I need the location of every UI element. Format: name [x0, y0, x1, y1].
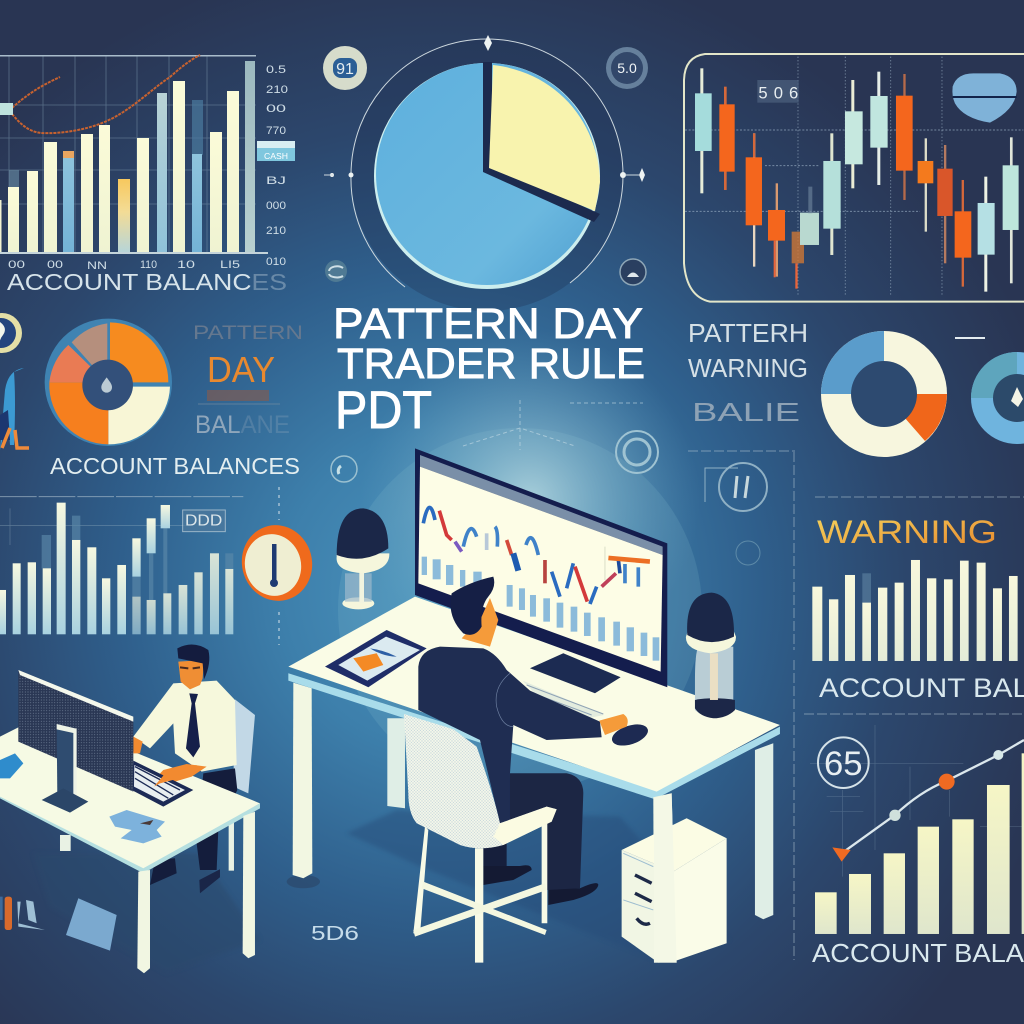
title: PATTERN DAY	[333, 300, 643, 348]
pie gap shadow	[483, 62, 600, 222]
icon: clock dial	[616, 431, 658, 473]
icon: top-right round badge	[606, 47, 648, 89]
icon: left small dial	[325, 260, 347, 282]
bars	[815, 753, 1024, 934]
office chair	[233, 699, 255, 793]
faint label: pattern warning	[688, 318, 808, 427]
axis labels: 00	[47, 259, 63, 271]
trend line	[842, 740, 1024, 853]
decorative separators	[688, 451, 1024, 960]
tablet	[325, 630, 427, 687]
trader	[418, 577, 628, 905]
far leg	[483, 823, 507, 867]
mouse	[609, 720, 651, 750]
smudged label below day	[198, 390, 280, 404]
panel: cropped donut far right	[971, 352, 1024, 444]
shoes	[483, 865, 532, 885]
axis labels: 770	[266, 125, 286, 137]
front desk legs	[293, 683, 677, 963]
monitor	[415, 448, 667, 687]
axis labels: 210	[266, 84, 288, 96]
decorative glow behind monitor	[338, 330, 702, 792]
faint label: pattern warning: WARNING	[688, 353, 808, 383]
axis labels: 000	[266, 200, 286, 212]
label: account balance bottom: ACCOUNT BALA	[812, 938, 1024, 968]
scene: main desk with trader	[287, 448, 780, 963]
bars	[0, 61, 255, 252]
label: 5D6: 5D6	[311, 923, 359, 945]
pie blue slice	[376, 63, 598, 285]
tag: DDD	[185, 513, 222, 530]
figure icon	[0, 368, 29, 450]
title	[333, 300, 645, 440]
pie rim	[374, 63, 600, 289]
panel: bottom-right growth chart	[810, 725, 1024, 934]
desk	[0, 727, 260, 873]
panel: left edge figure icons	[0, 313, 29, 450]
hand	[599, 714, 628, 735]
face	[178, 660, 204, 689]
desk top	[288, 597, 780, 799]
axis labels: 110	[140, 259, 157, 271]
icon: right lamp	[686, 593, 736, 718]
axis labels: 0.5	[266, 64, 286, 76]
icon: small dial left of monitor	[331, 456, 357, 482]
icon: faint dial	[736, 541, 760, 565]
legend tag	[257, 141, 295, 161]
icon: top-left round badge	[323, 46, 367, 90]
tie	[186, 693, 200, 757]
icon: left lamp	[337, 508, 389, 609]
donut segments	[49, 322, 170, 444]
faint label: pattern: PATTERN	[193, 323, 303, 344]
hair	[450, 577, 494, 635]
faint label: pattern warning: BALIE	[692, 397, 800, 427]
label: account balances: ACCOUNT BALANCES	[50, 453, 300, 479]
trousers	[150, 768, 237, 893]
monitor	[18, 670, 133, 813]
floor box	[66, 898, 117, 951]
decorative icon: marker	[955, 337, 985, 339]
icon: top-left round badge: 91	[336, 61, 354, 78]
keyboard	[523, 681, 604, 723]
panel: right donut	[821, 331, 947, 457]
scene: small desk with clerk	[0, 645, 260, 973]
screen bar chart	[422, 557, 659, 661]
axis labels	[8, 64, 288, 272]
bars	[0, 503, 233, 634]
axis labels: NN	[87, 260, 107, 272]
ghost candle	[792, 187, 819, 289]
title: PDT	[335, 381, 432, 440]
keyboard	[132, 761, 197, 807]
axis labels: 210	[266, 225, 286, 237]
faint label: pattern warning: PATTERH	[688, 318, 808, 348]
panel: right bar chart	[812, 560, 1018, 661]
candlesticks	[695, 68, 1019, 292]
neck and ear	[462, 598, 498, 647]
pie cream slice	[489, 65, 600, 211]
axis labels: LI5	[220, 259, 240, 271]
back desk legs	[387, 718, 773, 919]
ring icon	[0, 313, 22, 353]
screen line chart	[423, 507, 638, 604]
axis labels: 00	[266, 103, 286, 115]
clerk	[133, 645, 237, 787]
front right desk leg in front of cabinet	[654, 793, 677, 963]
trend line	[12, 55, 200, 133]
badge: 65	[824, 745, 863, 783]
monitor stand	[530, 653, 621, 693]
back desk legs	[60, 820, 234, 871]
icon: blue capsule	[952, 73, 1017, 123]
left hand	[133, 737, 143, 753]
icon: top-right round badge: 5.0	[617, 60, 637, 76]
panel: account balances donut	[45, 319, 172, 446]
tag	[183, 510, 225, 532]
panel: top-left account balances bar chart	[0, 55, 295, 295]
front desk legs	[137, 812, 255, 973]
legend tag: CASH	[264, 152, 288, 161]
panel: candlestick chart	[684, 54, 1024, 302]
icon: right small dial	[620, 259, 646, 285]
axis labels: 00	[8, 259, 25, 271]
label: ACCOUNT BALAN CES	[7, 269, 287, 295]
panel: top-centre pie chart	[324, 35, 645, 311]
faint label: balance: BALANE	[195, 411, 290, 439]
decorative dashed line near warning	[278, 487, 280, 645]
title: TRADER RULE	[337, 340, 645, 388]
desk items	[0, 753, 165, 843]
hair	[177, 645, 209, 679]
brows	[180, 664, 200, 671]
ring markers	[324, 35, 645, 182]
candle values label: 5 0 6	[758, 83, 798, 102]
label: day: DAY	[207, 349, 275, 390]
decorative dashes below title	[463, 400, 643, 450]
floor books	[0, 897, 45, 930]
shirt	[133, 681, 237, 772]
office chair	[404, 714, 557, 963]
icon: bars dial	[705, 463, 767, 511]
label: account balance right: ACCOUNT BAL	[819, 673, 1024, 703]
file cabinet	[622, 818, 727, 963]
label: warning: WARNING	[817, 514, 997, 550]
axis labels: BJ	[266, 175, 286, 187]
axis labels: 010	[266, 256, 286, 268]
icon: warning sign	[234, 518, 320, 608]
trousers	[507, 773, 583, 890]
ghost bars	[42, 516, 233, 600]
axis labels: 10	[177, 259, 195, 271]
panel: middle-left bar chart	[0, 497, 243, 634]
badge	[818, 737, 869, 788]
jacket	[418, 647, 602, 823]
